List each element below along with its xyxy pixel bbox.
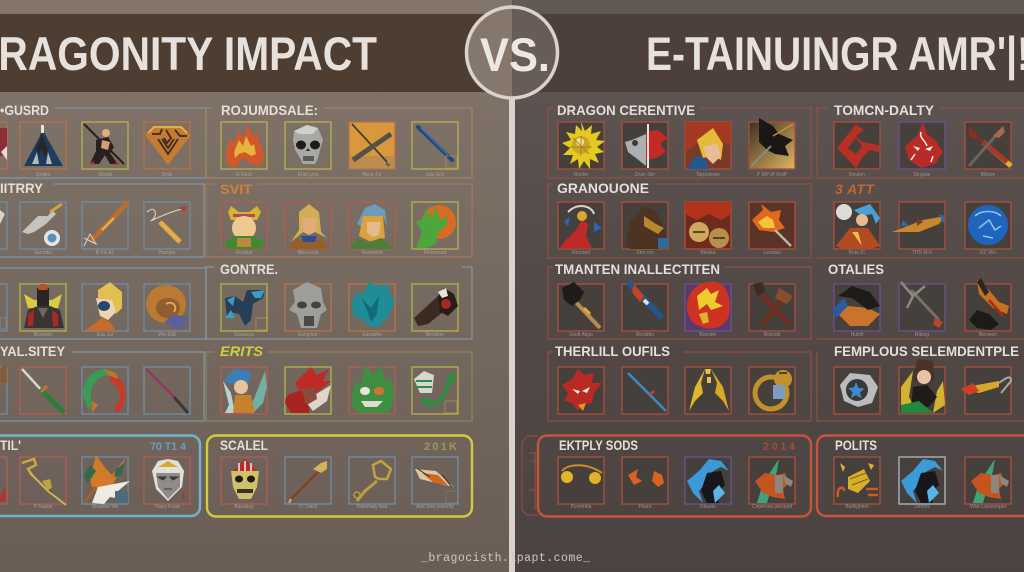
icon: dark mace: Seidt Aliga — [569, 332, 593, 338]
panel: column B row 4 — [206, 343, 472, 421]
icon: orange coiled beast: Wei EiB — [158, 332, 177, 338]
panel: left column A row 5 — [0, 436, 200, 516]
icon: A5 clipped — [0, 457, 7, 504]
icon: red green ring — [82, 367, 128, 414]
icon: brown gauntlet — [412, 284, 458, 338]
icon: blue and red rod: Bosidbo — [636, 332, 654, 338]
icon: red coil dragon: Rmurod — [572, 250, 590, 256]
icon: blue blade — [622, 367, 668, 414]
icon: yellow sun: Rootin — [574, 172, 588, 178]
icon: silver and red mask — [622, 122, 668, 178]
icon: orange sparks — [622, 457, 668, 510]
icon: red yellow flame egg — [685, 282, 731, 338]
icon: golden ring pair: Pyvemba — [571, 504, 592, 510]
icon: two faces in fire — [685, 202, 731, 256]
center divider — [509, 92, 515, 572]
icon: two faces in fire: Blaska — [700, 250, 716, 256]
icon: crossed hammers: Bolcodi — [764, 332, 780, 338]
panel: left column A row 1 — [0, 102, 206, 178]
icon: orange gem shield — [144, 122, 191, 178]
background: left half — [0, 0, 512, 572]
icon: skull with red helmet — [221, 457, 267, 510]
icon: flame — [221, 122, 267, 178]
panel: left column A row 2 — [0, 180, 204, 257]
icon: red yellow flame egg: Bonster — [699, 332, 717, 338]
VS badge: VS. — [480, 28, 550, 81]
icon: yellow sun — [558, 122, 605, 178]
score: 201k: 201K — [424, 441, 457, 453]
icon: A4 clipped — [0, 365, 7, 414]
icon: blue dragon silhouette in silver frame — [899, 457, 945, 510]
icon: crossed hammers — [749, 282, 795, 338]
icon: silver spear and orb — [20, 202, 66, 256]
icon: green orange splash variant — [965, 457, 1011, 510]
icon: black and orange fish — [832, 284, 880, 338]
icon: yellow scarab: Bullkghton — [845, 504, 869, 510]
panel: left column A row 3 — [0, 268, 206, 339]
icon: golden winged lance: TPD M-h — [912, 250, 932, 256]
icon: green orange splash variant: Wke Lancompet — [970, 504, 1007, 510]
icon: orange fish gem — [412, 457, 458, 510]
icon: fire torch — [749, 202, 795, 256]
icon: anime girl with green dress — [899, 359, 945, 414]
panel: column B row 2 — [206, 181, 472, 257]
icon: green serpent wand — [412, 367, 458, 414]
icon: long-haired warrior — [285, 202, 331, 256]
icon: stone mask: Eshymor — [298, 332, 318, 338]
icon: green orange splash — [749, 457, 795, 510]
icon: orange coiled beast — [144, 284, 190, 338]
heading: ektply sods: EKTPLY SODS — [559, 437, 638, 453]
panel: column B row 5 — [207, 436, 472, 516]
header band right — [512, 14, 1024, 92]
icon: red fire mask: Dlogale — [914, 172, 931, 178]
icon: black feather axe on gold — [749, 118, 795, 178]
bracket: left of column C row 5 — [522, 436, 538, 515]
icon: black and orange fish: Hublif — [851, 332, 864, 338]
icon: blonde hero: Tarpoteure — [696, 172, 720, 178]
icon: red angular emblem — [834, 122, 881, 178]
icon: golden ring amulet — [749, 367, 795, 414]
icon: stone mask — [285, 282, 331, 338]
icon: orange bow staff: B XX AL — [96, 250, 115, 256]
heading: yal.sitey: YAL.SITEY — [0, 343, 66, 359]
heading: gusrd: •GUSRD — [0, 102, 49, 118]
icon: golden ornate key staff: P Septis — [34, 504, 53, 510]
icon: blue staff: Julo Eric — [425, 172, 445, 178]
icon: dark mountain cloak: Dedirn — [36, 172, 51, 178]
icon: skull with red helmet: Banskay — [234, 504, 254, 510]
background: right half — [512, 0, 1024, 572]
icon: golden shovel key: Rammaly tear — [356, 504, 388, 510]
heading: gontre: GONTRE. — [220, 261, 278, 277]
icon: orange fish gem: Asd Sea sonority — [416, 504, 454, 510]
icon: yellow scarab — [834, 457, 880, 510]
panel: column B row 1 — [206, 102, 472, 178]
icon: red haired beast — [285, 367, 331, 414]
heading: granouone: GRANOUONE — [557, 180, 649, 196]
icon: crossed swords on orange — [349, 122, 395, 178]
icon: blue dragonfly creature — [221, 284, 267, 338]
heading: polits: POLITS — [835, 437, 877, 453]
panel: column D row 5 — [817, 436, 1024, 516]
icon: hooded elf: Remestid — [361, 250, 383, 256]
header band left — [0, 14, 512, 92]
icon: red fire mask — [899, 122, 945, 178]
heading: scalel: SCALEL — [220, 437, 268, 453]
icon: A2 clipped — [0, 202, 7, 249]
icon: silver and red mask: Dran Jler — [635, 172, 655, 178]
icon: long axe: H Toard — [299, 504, 317, 510]
icon: blue staff — [412, 122, 458, 178]
heading: svit: SVIT — [220, 181, 252, 197]
icon: blue-haired warrior — [834, 202, 880, 256]
icon: blue rune orb: DZ Vllo — [980, 250, 996, 256]
VS badge — [466, 7, 558, 98]
icon: blue rune orb — [965, 202, 1011, 256]
heading: otalies: OTALIES — [828, 261, 884, 277]
icon: green dagger — [20, 367, 66, 414]
icon: teal hair creature — [349, 282, 395, 338]
heading: 3 att: 3 ATT — [835, 181, 875, 197]
icon: flame: E Root — [236, 172, 252, 178]
icon: orange fox with white feathers: Shadow Ink — [92, 504, 119, 510]
heading: til: TIL' — [0, 437, 21, 453]
panel: column C row 2 — [548, 180, 811, 258]
icon: blue-haired warrior: Bsta IC — [849, 250, 866, 256]
icon: orange gem shield: Sytik — [162, 172, 173, 178]
icon: chain blade: Hazidar — [158, 250, 176, 256]
icon: A1 clipped — [0, 122, 7, 169]
panel: column D row 4 — [817, 343, 1024, 421]
icon: golden rocket lance — [961, 367, 1011, 414]
icon: white silver mask — [144, 457, 190, 510]
icon: green-collared girl: Rostani — [236, 250, 252, 256]
heading: tmanten inallectiten: TMANTEN INALLECTITEN — [555, 261, 720, 277]
icon: silver hex ring — [834, 367, 880, 414]
icon: silver skull — [285, 122, 331, 178]
icon: purple rod — [144, 367, 190, 414]
icon: gold wings — [685, 367, 731, 414]
icon: brown hooded rogue: Sho ros — [636, 250, 654, 256]
score: 2014: 2014 — [763, 441, 796, 453]
icon: red angular emblem: Routen — [849, 172, 865, 178]
icon: green orange splash: Cepenvia pecopet — [752, 504, 793, 510]
icon: long axe — [285, 457, 331, 510]
icon: blue-haired fairy — [221, 367, 267, 414]
icon: blue dragon silhouette in silver frame: Dinnos — [914, 504, 930, 510]
icon: fire torch: Lenisko — [763, 250, 781, 256]
icon: dark armored knight: Brainsto — [34, 332, 52, 338]
icon: grey trident: Riblog — [915, 332, 929, 338]
icon: blue dragonfly creature: Ssaonpa — [234, 332, 254, 338]
icon: crossed red dagger: Bilkive — [981, 172, 995, 178]
panel: column C row 3 — [548, 261, 811, 339]
panel: column D row 1 — [817, 102, 1024, 178]
icon: white silver mask: Tracy Frost — [154, 504, 180, 510]
icon: orange sparks: Pkaro — [638, 504, 652, 510]
score: 7014: 70 T1 4 — [150, 441, 187, 453]
icon: blonde eye-patch hero — [82, 282, 128, 338]
icon: blue dragon silhouette — [685, 457, 731, 510]
icon: green-collared girl — [221, 202, 267, 256]
icon: brown hooded rogue — [622, 202, 668, 256]
heading: iitrry: IITRRY — [0, 180, 44, 196]
icon: red spiky mask — [558, 367, 604, 414]
icon: crossed red dagger — [965, 122, 1011, 178]
icon: blonde hero — [685, 122, 731, 178]
icon: dark mace — [558, 282, 604, 338]
icon: blue and red rod — [622, 282, 668, 338]
heading: rojumdsale: ROJUMDSALE: — [221, 102, 318, 118]
panel: column C row 4 — [548, 343, 811, 421]
icon: brown gauntlet: Bervicer — [426, 332, 445, 338]
icon: golden shovel key — [349, 457, 395, 510]
icon: hooded elf — [349, 202, 395, 256]
icon: chain blade — [144, 202, 190, 256]
icon: golden ornate key staff — [20, 457, 66, 510]
icon: dark mountain cloak — [20, 122, 66, 178]
icon: dark armored knight — [20, 284, 66, 338]
footer url: _bragocisth.lpapt.come_ — [420, 552, 590, 565]
icon: golden winged lance — [892, 202, 945, 256]
icon: silver spear and orb: Swordis — [34, 250, 52, 256]
icon: golden ring pair — [558, 457, 604, 510]
heading: femplous selemdentple: FEMPLOUS SELEMDENTPLE — [834, 343, 1019, 359]
icon: blonde eye-patch hero: Eas Jui — [97, 332, 113, 338]
icon: orange fox with white feathers — [82, 455, 130, 510]
icon: green monster — [349, 365, 395, 414]
icon: red coil dragon — [558, 202, 604, 256]
icon: green claw on orange orb — [412, 202, 458, 256]
icon: silver skull: End Lyns — [298, 172, 319, 178]
panel: left column A row 4 — [0, 343, 204, 421]
icon: blue dragon silhouette: Rlaurts — [700, 504, 716, 510]
icon: black feather axe on gold: P MP IP RolP — [757, 172, 788, 178]
panel: column C row 5 — [538, 436, 811, 516]
icon: grey trident — [899, 282, 945, 338]
heading: therlill oufils: THERLILL OUFILS — [555, 343, 670, 359]
icon: green claw on orange orb: Fernwood — [424, 250, 446, 256]
heading: dragon cerentive: DRAGON CERENTIVE — [557, 102, 695, 118]
panel: column C row 1 — [548, 102, 811, 178]
heading: tomcn-dalty: TOMCN-DALTY — [834, 102, 935, 118]
icon: long-haired warrior: Blessund — [298, 250, 318, 256]
icon: orange bow staff — [82, 202, 128, 256]
icon: crossed swords on orange: Near Jul — [363, 172, 381, 178]
icon: black orange claw — [965, 278, 1011, 338]
icon: A3 clipped — [0, 284, 7, 331]
icon: teal hair creature: Sanashe — [362, 332, 382, 338]
heading: erits: ERITS — [220, 343, 264, 359]
icon: warrior with spear — [82, 122, 128, 178]
icon: black orange claw: Benwon — [979, 332, 997, 338]
icon: warrior with spear: Sharik — [98, 172, 113, 178]
panel: column B row 3 — [206, 261, 472, 339]
